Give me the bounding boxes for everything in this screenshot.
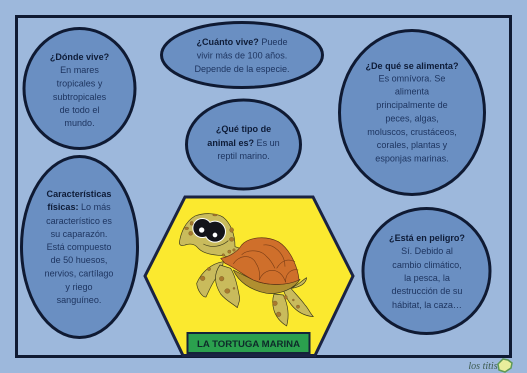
panel: cuánto vive — [162, 22, 322, 88]
panel: dónde vive: subtropicales — [53, 92, 107, 102]
panel: de qué se alimenta — [340, 30, 484, 194]
panel: dónde vive: En mares — [60, 65, 99, 75]
icon: rear flippers — [273, 278, 313, 326]
panel: qué tipo de animal es: animal es? Es un — [207, 138, 280, 148]
icon: front flippers — [197, 262, 240, 308]
panel: características físicas: Características — [47, 189, 111, 199]
panel: de qué se alimenta: ¿De qué se alimenta? — [365, 61, 459, 71]
panel: está en peligro: ¿Está en peligro? — [389, 233, 465, 243]
panel: dónde vive: ¿Dónde vive? — [50, 52, 109, 62]
panel: cuánto vive: Depende de la especie. — [194, 64, 290, 74]
panel: de qué se alimenta: alimenta — [395, 86, 430, 96]
panel: qué tipo de animal es: reptil marino. — [217, 151, 270, 161]
panel: dónde vive: mundo. — [64, 118, 95, 128]
logo — [468, 359, 512, 372]
panel: características físicas: sanguíneo. — [57, 295, 101, 305]
title label — [188, 333, 310, 353]
panel: características físicas: característico es — [46, 216, 112, 226]
panel: dónde vive: de todo el — [60, 105, 99, 115]
panel: dónde vive — [24, 28, 135, 148]
panel: características físicas: su caparazón. — [51, 229, 107, 239]
panel: está en peligro: cambio climático, — [392, 260, 462, 270]
panel: de qué se alimenta: Es omnívora. Se — [379, 74, 445, 84]
panel: está en peligro — [363, 208, 490, 334]
panel: de qué se alimenta: esponjas marinas. — [375, 154, 449, 164]
panel: cuánto vive: ¿Cuánto vive? Puede — [196, 37, 288, 47]
icon: sea turtle — [179, 214, 313, 326]
hexagon — [145, 197, 353, 356]
panel: características físicas — [22, 156, 138, 338]
panel: de qué se alimenta: moluscos, crustáceos, — [367, 127, 457, 137]
panel: de qué se alimenta: peces, algas, — [385, 114, 439, 124]
title label: LA TORTUGA MARINA — [197, 339, 300, 350]
panel: de qué se alimenta: principalmente de — [376, 100, 448, 110]
panel: está en peligro: hábitat, la caza… — [392, 300, 462, 310]
icon: shell — [221, 238, 299, 284]
panel: características físicas: nervios, cartílago — [45, 268, 113, 278]
logo: los titis — [468, 361, 498, 372]
panel: características físicas: físicas: Lo más — [47, 202, 111, 212]
panel: está en peligro: Sí. Debido al — [401, 246, 453, 256]
panel: está en peligro: destrucción de su — [392, 286, 462, 296]
icon: belly — [233, 270, 300, 294]
icon: skin spots — [185, 214, 300, 317]
panel: características físicas: Está compuesto — [47, 242, 111, 252]
icon: shell scutes — [233, 245, 298, 282]
panel: de qué se alimenta: corales, plantas y — [377, 140, 448, 150]
panel: características físicas: de 50 huesos, — [51, 255, 107, 265]
panel: cuánto vive: vivir más de 100 años. — [197, 50, 287, 60]
icon: smile — [203, 241, 228, 246]
panel: qué tipo de animal es: ¿Qué tipo de — [216, 124, 271, 134]
panel: está en peligro: la pesca, la — [404, 273, 451, 283]
panel: características físicas: y riego — [65, 282, 93, 292]
panel: qué tipo de animal es — [186, 100, 300, 189]
icon: head and neck — [179, 214, 240, 257]
panel: dónde vive: tropicales y — [57, 78, 103, 88]
icon: eyes — [192, 218, 226, 243]
